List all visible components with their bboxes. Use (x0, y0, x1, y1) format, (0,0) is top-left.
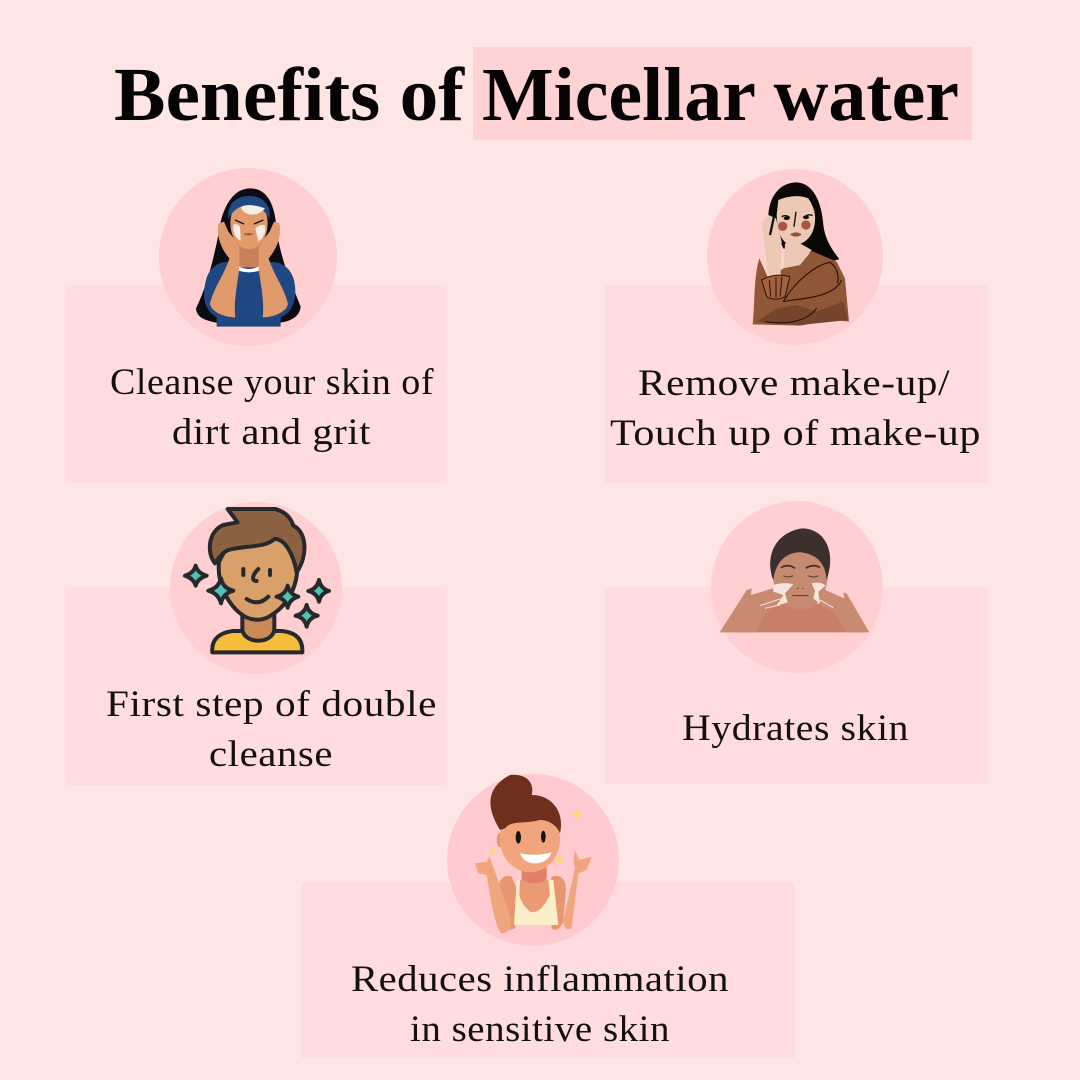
panel: cleanse skin (65, 168, 447, 483)
text: remove make-up (610, 363, 981, 454)
text: reduces inflammation: in sensitive skin (410, 1009, 670, 1050)
text: cleanse skin: dirt and grit (172, 412, 371, 453)
panel: reduces inflammation (301, 774, 795, 1058)
icon: man washing face (720, 528, 869, 632)
icon: happy woman with sparkles (475, 775, 592, 933)
panel: remove make-up (605, 169, 988, 483)
icon: boy with sparkles (185, 509, 329, 652)
title (114, 47, 972, 140)
text: double cleanse: cleanse (209, 734, 333, 775)
text: remove make-up: Touch up of make-up (610, 413, 981, 454)
panel: hydrates (605, 501, 988, 784)
title: Micellar water (482, 53, 959, 137)
icon: woman applying make-up (753, 182, 849, 326)
text: double cleanse (106, 684, 437, 775)
text: cleanse skin: Cleanse your skin of (110, 362, 434, 403)
text: cleanse skin (110, 362, 434, 453)
text: reduces inflammation: Reduces inflammation (351, 959, 729, 1000)
text: remove make-up: Remove make-up/ (638, 363, 950, 404)
icon: woman washing face (196, 188, 301, 327)
title: Benefits of (114, 53, 466, 137)
text: reduces inflammation (351, 959, 729, 1050)
panel: double cleanse (65, 502, 447, 785)
text: hydrates: Hydrates skin (682, 708, 909, 749)
text: double cleanse: First step of double (106, 684, 437, 725)
